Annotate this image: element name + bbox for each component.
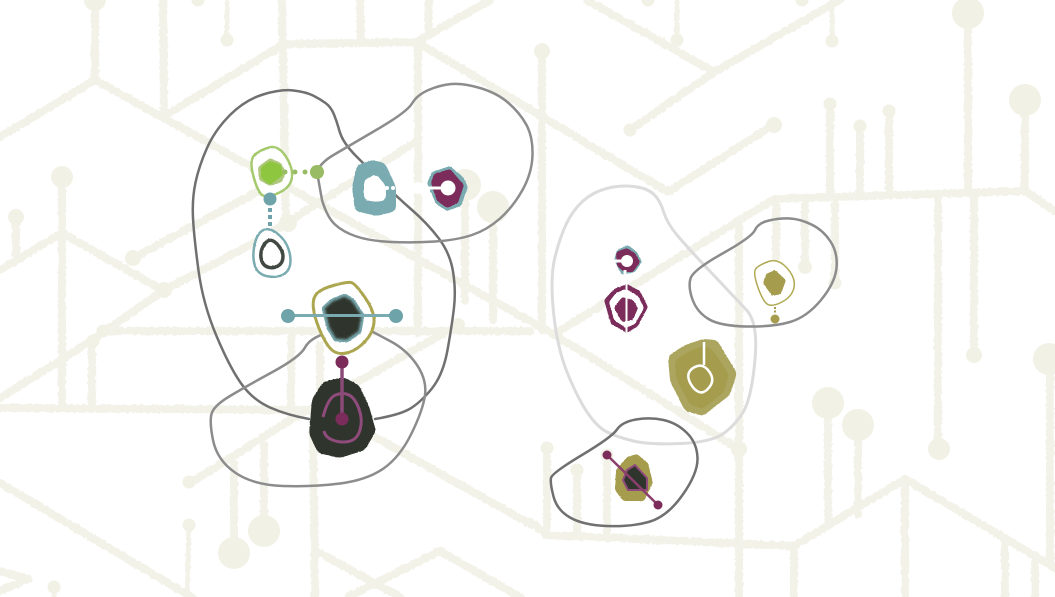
node group: center olive ring: [281, 282, 403, 354]
outline: light center-right cluster: [552, 186, 756, 444]
node group: teal blob: [352, 160, 396, 216]
outline: right cluster: [690, 218, 837, 327]
node group: maroon blob: [412, 166, 468, 211]
outline: upper right cluster: [317, 84, 533, 242]
node group: bottom olive: [602, 450, 662, 510]
outline: large dark cluster: [193, 90, 455, 419]
outline: lower cluster: [211, 332, 425, 486]
node group: small maroon: [613, 245, 642, 277]
node group: right olive: [755, 261, 794, 324]
node group: green: [251, 147, 324, 196]
node group: dark blob: [309, 356, 376, 458]
node group: teal connector and ring: [253, 192, 290, 277]
outline: bottom cluster: [551, 418, 698, 526]
node group: large olive: [668, 339, 737, 416]
node group: maroon ring: [604, 284, 648, 333]
